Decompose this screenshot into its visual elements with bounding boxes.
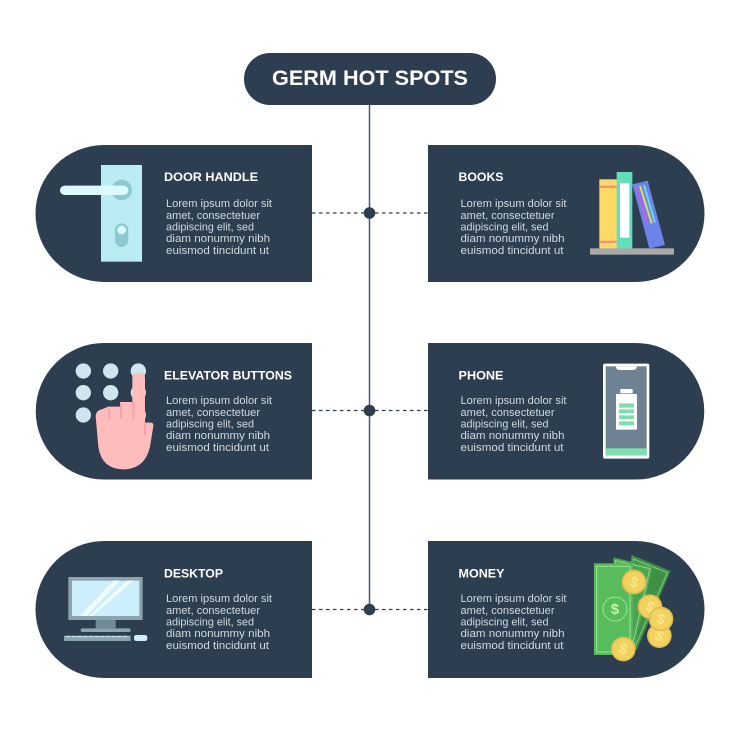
text block: desktop: amet, consectetuer <box>166 605 260 617</box>
text block: door handle: Lorem ipsum dolor sit <box>166 198 272 210</box>
heading: phone: PHONE <box>458 368 504 382</box>
text block: phone: amet, consectetuer <box>460 407 555 419</box>
text block: phone <box>460 395 567 454</box>
panel: phone <box>428 343 704 480</box>
icon: banknotes and coins: $ <box>611 602 619 618</box>
title <box>244 53 496 105</box>
icon: phone with battery <box>603 364 649 459</box>
heading: books: BOOKS <box>458 170 504 184</box>
heading: desktop: DESKTOP <box>164 566 223 580</box>
text block: books: adipiscing elit, sed <box>460 222 549 234</box>
text block: door handle: adipiscing elit, sed <box>166 222 254 234</box>
text block: phone: diam nonummy nibh <box>460 430 565 442</box>
text block: elevator buttons <box>166 395 272 454</box>
icon: banknotes and coins: $ <box>652 628 666 646</box>
text block: elevator buttons: diam nonummy nibh <box>166 430 270 442</box>
text block: money: diam nonummy nibh <box>460 628 565 640</box>
text block: elevator buttons: amet, consectetuer <box>166 407 260 419</box>
text block: books: Lorem ipsum dolor sit <box>460 198 567 210</box>
panel: desktop <box>36 541 312 678</box>
icon: door handle <box>60 165 142 262</box>
panel: books <box>428 145 704 282</box>
panel: elevator buttons <box>36 343 312 480</box>
text block: books: amet, consectetuer <box>460 210 555 222</box>
text block: money <box>460 593 567 652</box>
icon: banknotes and coins: $ <box>654 611 667 629</box>
text block: money: adipiscing elit, sed <box>460 616 549 628</box>
icon: banknotes and coins: $ <box>643 599 656 617</box>
title: GERM HOT SPOTS <box>272 67 468 90</box>
panel: door handle <box>36 145 312 282</box>
text block: elevator buttons: euismod tincidunt ut <box>166 442 269 454</box>
icon: desktop computer <box>64 577 147 641</box>
text block: money: Lorem ipsum dolor sit <box>460 593 567 605</box>
icon: banknotes and coins: $ <box>627 574 640 592</box>
text block: desktop: adipiscing elit, sed <box>166 616 254 628</box>
text block: phone: Lorem ipsum dolor sit <box>460 395 567 407</box>
panel: money <box>428 541 704 678</box>
icon: banknotes and coins: $ <box>616 641 630 659</box>
text block: elevator buttons: adipiscing elit, sed <box>166 418 254 430</box>
text block: door handle <box>166 198 272 257</box>
text block: money: euismod tincidunt ut <box>460 640 564 652</box>
icon: banknotes and coins <box>594 555 673 661</box>
icon: books on shelf <box>590 172 674 255</box>
text block: desktop: diam nonummy nibh <box>166 628 270 640</box>
heading: elevator buttons: ELEVATOR BUTTONS <box>164 368 292 382</box>
text block: door handle: diam nonummy nibh <box>166 233 270 245</box>
text block: desktop <box>166 593 272 652</box>
text block: desktop: euismod tincidunt ut <box>166 640 269 652</box>
text block: phone: adipiscing elit, sed <box>460 418 549 430</box>
heading: door handle: DOOR HANDLE <box>164 170 258 184</box>
central timeline connector <box>312 100 428 615</box>
heading: money: MONEY <box>458 566 504 580</box>
text block: phone: euismod tincidunt ut <box>460 442 564 454</box>
text block: elevator buttons: Lorem ipsum dolor sit <box>166 395 272 407</box>
text block: books <box>460 198 567 257</box>
text block: books: diam nonummy nibh <box>460 233 565 245</box>
text block: desktop: Lorem ipsum dolor sit <box>166 593 272 605</box>
text block: books: euismod tincidunt ut <box>460 245 564 257</box>
text block: door handle: euismod tincidunt ut <box>166 245 269 257</box>
text block: door handle: amet, consectetuer <box>166 210 260 222</box>
text block: money: amet, consectetuer <box>460 605 555 617</box>
icon: finger pressing elevator buttons <box>76 363 153 469</box>
